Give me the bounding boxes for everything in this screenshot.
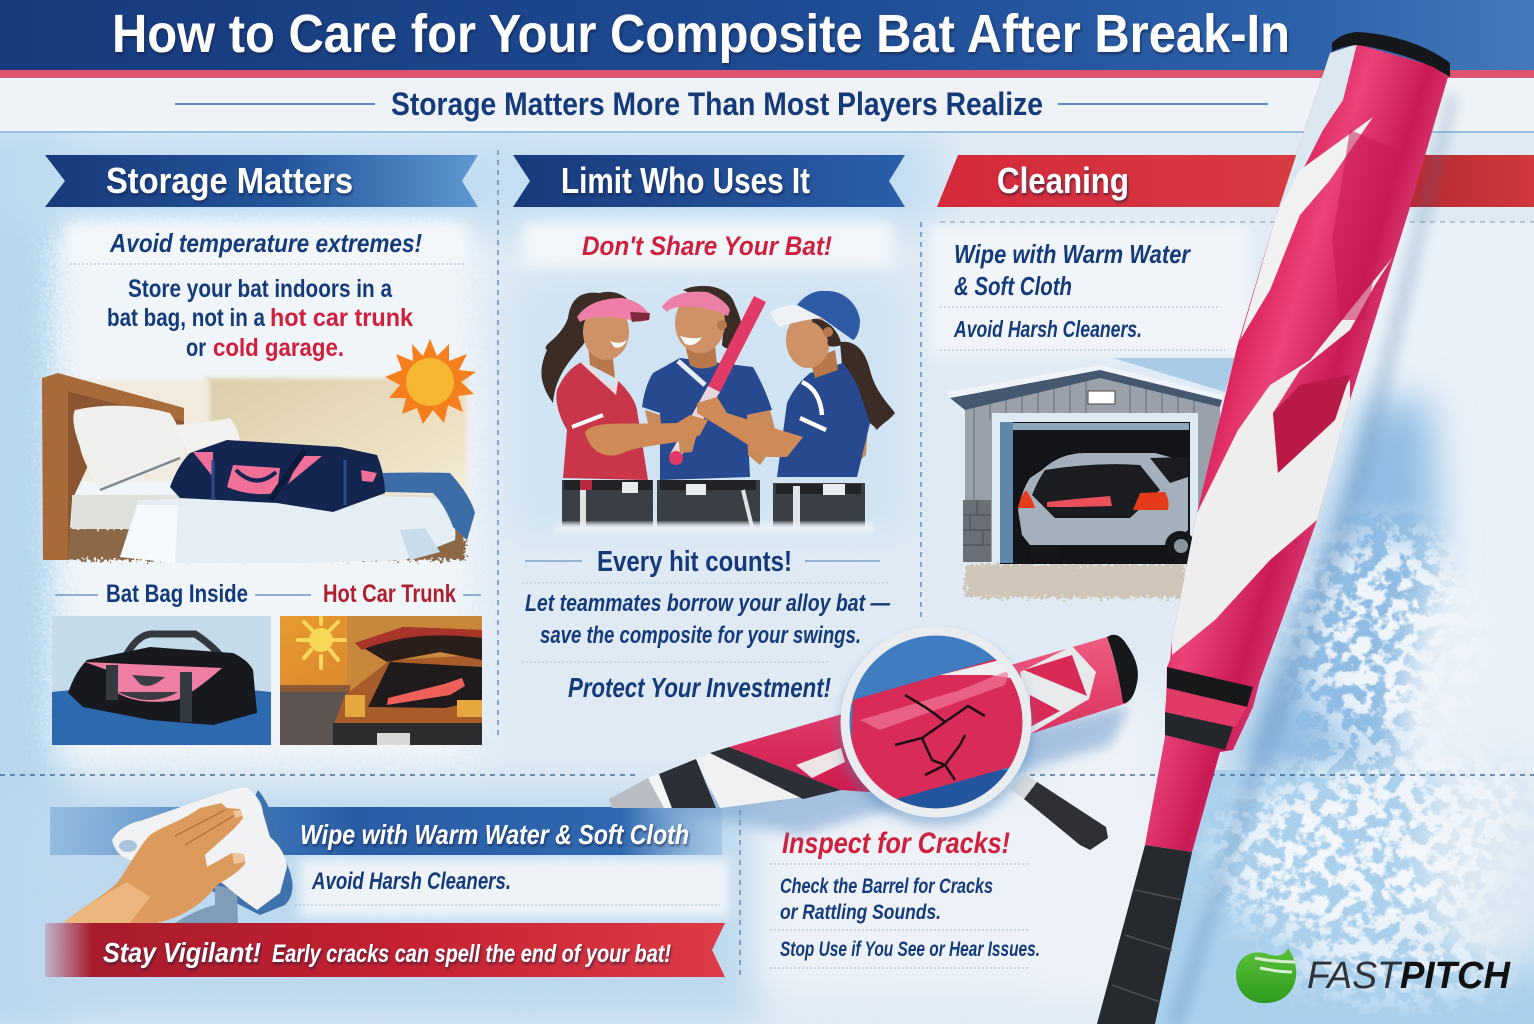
- illustration: small bat under magnifier: [609, 635, 1138, 835]
- text: avoid harsh cleaners: Avoid Harsh Cleaners.: [311, 868, 511, 895]
- illustration: car in garage: [947, 358, 1235, 598]
- text block: storage advice: or: [186, 334, 206, 362]
- label: bat bag inside: Bat Bag Inside: [106, 580, 248, 608]
- banner: stay vigilant: Early cracks can spell the end of your bat!: [272, 940, 671, 968]
- logo: fastpitch: [1236, 948, 1512, 1003]
- crack: [895, 695, 985, 780]
- illustration: three players sharing a bat: [541, 286, 895, 533]
- banner: stay vigilant: [45, 923, 725, 977]
- panel: storage matters: [42, 155, 482, 745]
- wipe banner: [50, 807, 722, 855]
- text block: barrel check: [780, 875, 993, 924]
- panel: cleaning: [937, 155, 1534, 598]
- icon: hand wiping with cloth: [63, 788, 292, 923]
- text block: barrel check: or Rattling Sounds.: [780, 901, 941, 924]
- illustration: bat bag inside: [52, 616, 271, 745]
- text block: wipe instructions: [940, 239, 1225, 350]
- banner: stay vigilant: Stay Vigilant!: [103, 937, 261, 968]
- ribbon: cleaning: Cleaning: [997, 160, 1129, 201]
- illustration: hot car trunk: [280, 616, 482, 745]
- text block: every hit counts: Every hit counts!: [597, 546, 792, 578]
- callout: avoid temperature extremes: Avoid temperature extremes!: [109, 228, 422, 258]
- illustration: bat bag on bed: [42, 373, 475, 563]
- player in red: [541, 292, 708, 527]
- ribbon: limit who uses it: [513, 155, 905, 207]
- text block: every hit counts: Let teammates borrow your alloy bat —: [525, 590, 891, 617]
- ribbon: storage matters: Storage Matters: [106, 160, 353, 201]
- text block: wipe instructions: Avoid Harsh Cleaners.: [953, 316, 1142, 342]
- ribbon: limit who uses it: Limit Who Uses It: [561, 160, 810, 201]
- icon: sun: [385, 339, 476, 424]
- title: How to Care for Your Composite Bat After Break-In: [112, 4, 1290, 64]
- ribbon: cleaning: [937, 155, 1534, 207]
- panel: inspect for cracks: [770, 827, 1040, 968]
- wordmark: FAST: [1307, 955, 1403, 997]
- icon: magnifying glass with crack: [840, 631, 1108, 850]
- wipe banner: Wipe with Warm Water & Soft Cloth: [300, 819, 689, 850]
- icon: green leaf: [1236, 948, 1296, 1003]
- text block: storage advice: bat bag, not in a: [107, 304, 266, 332]
- panel: inspect for cracks: Inspect for Cracks!: [782, 827, 1010, 860]
- text block: storage advice: Store your bat indoors in a: [128, 275, 393, 303]
- car: [1018, 453, 1195, 561]
- ribbon: storage matters: [45, 155, 478, 207]
- player in blue with visor: [642, 286, 778, 527]
- panel: limit who uses it: [513, 155, 905, 703]
- text block: every hit counts: [522, 546, 891, 662]
- text block: every hit counts: save the composite for your swings.: [540, 622, 861, 649]
- text block: wipe instructions: & Soft Cloth: [954, 271, 1072, 301]
- wordmark: PITCH: [1400, 955, 1512, 997]
- callout: don't share your bat: Don't Share Your Bat!: [582, 231, 832, 261]
- text block: barrel check: Check the Barrel for Cracks: [780, 875, 993, 898]
- wordmark: [1307, 955, 1512, 997]
- text: stop use warning: Stop Use if You See or Hear Issues.: [780, 938, 1040, 961]
- text block: wipe instructions: Wipe with Warm Water: [954, 239, 1192, 269]
- callout: avoid temperature extremes: [66, 222, 466, 264]
- subtitle: Storage Matters More Than Most Players Realize: [391, 86, 1043, 122]
- text block: storage advice: [107, 275, 413, 362]
- text block: storage advice: hot car trunk: [270, 304, 413, 332]
- callout: don't share your bat: [523, 222, 893, 266]
- text block: storage advice: cold garage.: [213, 334, 344, 362]
- callout: protect your investment: Protect Your Investment!: [568, 672, 831, 703]
- header band: [0, 0, 1534, 133]
- illustration: large pink composite bat: [1097, 32, 1458, 1024]
- label: hot car trunk: Hot Car Trunk: [323, 580, 456, 608]
- player in blue with cap: [697, 291, 895, 527]
